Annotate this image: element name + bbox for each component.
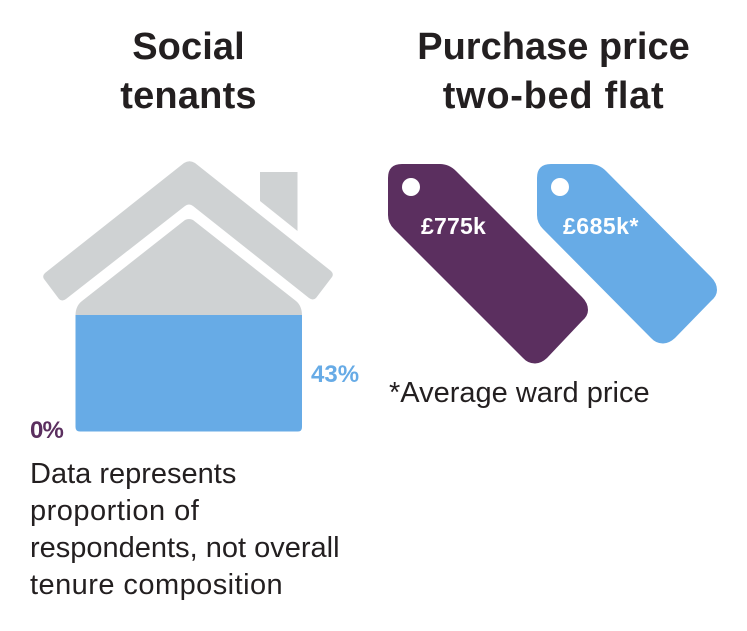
- tag body: [388, 164, 588, 364]
- heading: social tenants: Social: [132, 26, 245, 68]
- note: data description: [30, 458, 340, 601]
- price tag: purple: [388, 164, 588, 364]
- tag body: [537, 164, 717, 344]
- heading: social tenants: [120, 26, 257, 117]
- house upper wall: [76, 219, 302, 316]
- heading: purchase price: Purchase price: [417, 26, 690, 68]
- note: data description: tenure composition: [30, 569, 283, 601]
- note: data description: respondents, not overall: [30, 532, 340, 564]
- tag hole: [551, 178, 569, 196]
- chimney: [260, 172, 298, 231]
- house icon: [43, 161, 333, 432]
- roof: [43, 161, 333, 300]
- value: 0%: 0%: [30, 417, 63, 444]
- note: data description: proportion of: [30, 495, 199, 527]
- house blue fill 43%: [76, 315, 302, 432]
- note: data description: Data represents: [30, 458, 236, 490]
- heading: purchase price: [417, 26, 690, 117]
- tag label: £775k: £775k: [421, 213, 486, 239]
- tag label: £685k*: £685k*: [563, 213, 639, 239]
- price tag: blue: [537, 164, 717, 344]
- tag hole: [402, 178, 420, 196]
- note: average ward price: *Average ward price: [389, 377, 650, 409]
- heading: purchase price: two-bed flat: [443, 75, 664, 117]
- heading: social tenants: tenants: [120, 75, 257, 117]
- value: 43%: 43%: [311, 361, 359, 388]
